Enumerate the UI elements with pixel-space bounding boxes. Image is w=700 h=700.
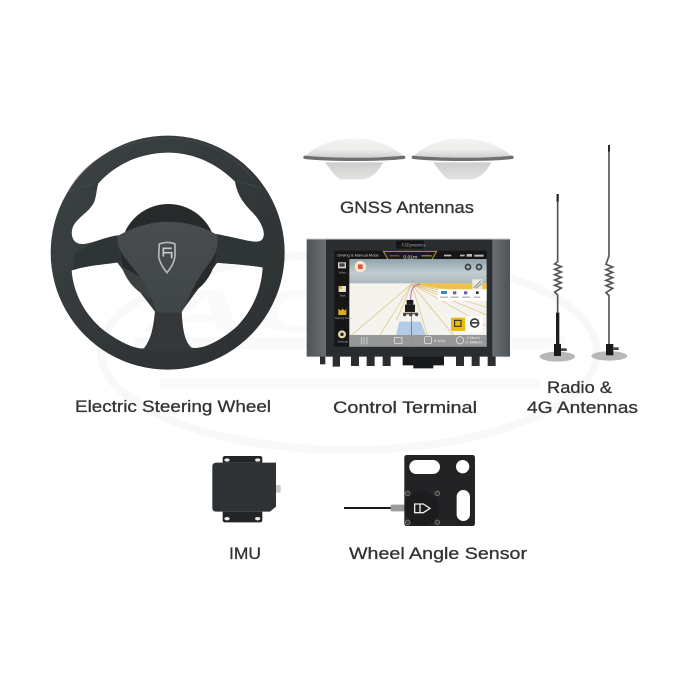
connectors: [320, 356, 496, 368]
sensor cable: [344, 505, 392, 511]
label: Radio & 4G Antennas: Radio &: [547, 378, 613, 397]
label: Electric Steering Wheel: Electric Steering Wheel: [75, 397, 271, 416]
speed gauge: 0.01m: [403, 254, 417, 260]
label: Wheel Angle Sensor: Wheel Angle Sensor: [349, 544, 527, 563]
GNSS antennas: [304, 138, 513, 179]
camera view ground: [349, 283, 487, 347]
rim highlights: [68, 138, 262, 192]
bottom bar: [349, 335, 487, 347]
camera view sky: [349, 259, 487, 284]
left rail icons: Video: [339, 271, 347, 275]
left rail icons: History Data: [335, 316, 352, 320]
screen: [334, 251, 487, 347]
tall antenna: [591, 145, 627, 361]
brand badge: [396, 241, 425, 249]
guidance lines: [352, 284, 487, 335]
center pad: [117, 222, 218, 313]
sky controls: [355, 261, 482, 289]
sensor logo: [415, 504, 430, 513]
cable connector: [391, 505, 405, 511]
short antenna: [540, 194, 575, 362]
action buttons: [451, 316, 483, 333]
bottom spoke: [144, 313, 193, 350]
left rail icons: [335, 262, 352, 344]
label: Radio & 4G Antennas: [527, 378, 638, 417]
label: Radio & 4G Antennas: 4G Antennas: [527, 398, 638, 417]
mounting plate: [404, 455, 475, 526]
label: IMU: IMU: [229, 544, 261, 563]
wheel rim: [51, 136, 285, 370]
bottom bar: 5.5km/h: [467, 336, 480, 340]
steering wheel: [51, 136, 285, 370]
left rail icons: Settings: [337, 340, 349, 344]
watermark logo: AGRI: [140, 277, 509, 346]
control terminal: [307, 239, 510, 368]
hub lower left shade: [122, 267, 155, 300]
wheel angle sensor: [344, 455, 475, 526]
bottom bar: (1.4Mile/h): [465, 341, 483, 345]
hub disc: [121, 204, 216, 299]
radio and 4G antennas: [540, 145, 627, 362]
screen status text: Driving & Manual Mode: [337, 253, 380, 258]
brand badge: FJDynamics: [402, 242, 425, 247]
speed gauge: [383, 251, 437, 260]
bottom bar: 0.10m: [434, 338, 446, 343]
tractor: [403, 300, 418, 316]
status icons: [444, 254, 484, 257]
antenna right: [413, 138, 513, 179]
IMU unit: [212, 456, 281, 522]
screws: [405, 491, 440, 525]
label: GNSS Antennas: GNSS Antennas: [340, 198, 474, 217]
sensor disc: [405, 491, 440, 526]
left rail icons: Task: [339, 293, 346, 297]
guidance field: [396, 322, 426, 335]
label: Control Terminal: Control Terminal: [333, 398, 477, 417]
info cards: [438, 289, 487, 301]
antenna left: [304, 138, 404, 179]
terminal body: [326, 239, 493, 357]
watermark logo: [101, 254, 597, 450]
planned path: [411, 284, 420, 300]
wheel emblem: [159, 242, 175, 273]
side spokes: [73, 236, 120, 270]
